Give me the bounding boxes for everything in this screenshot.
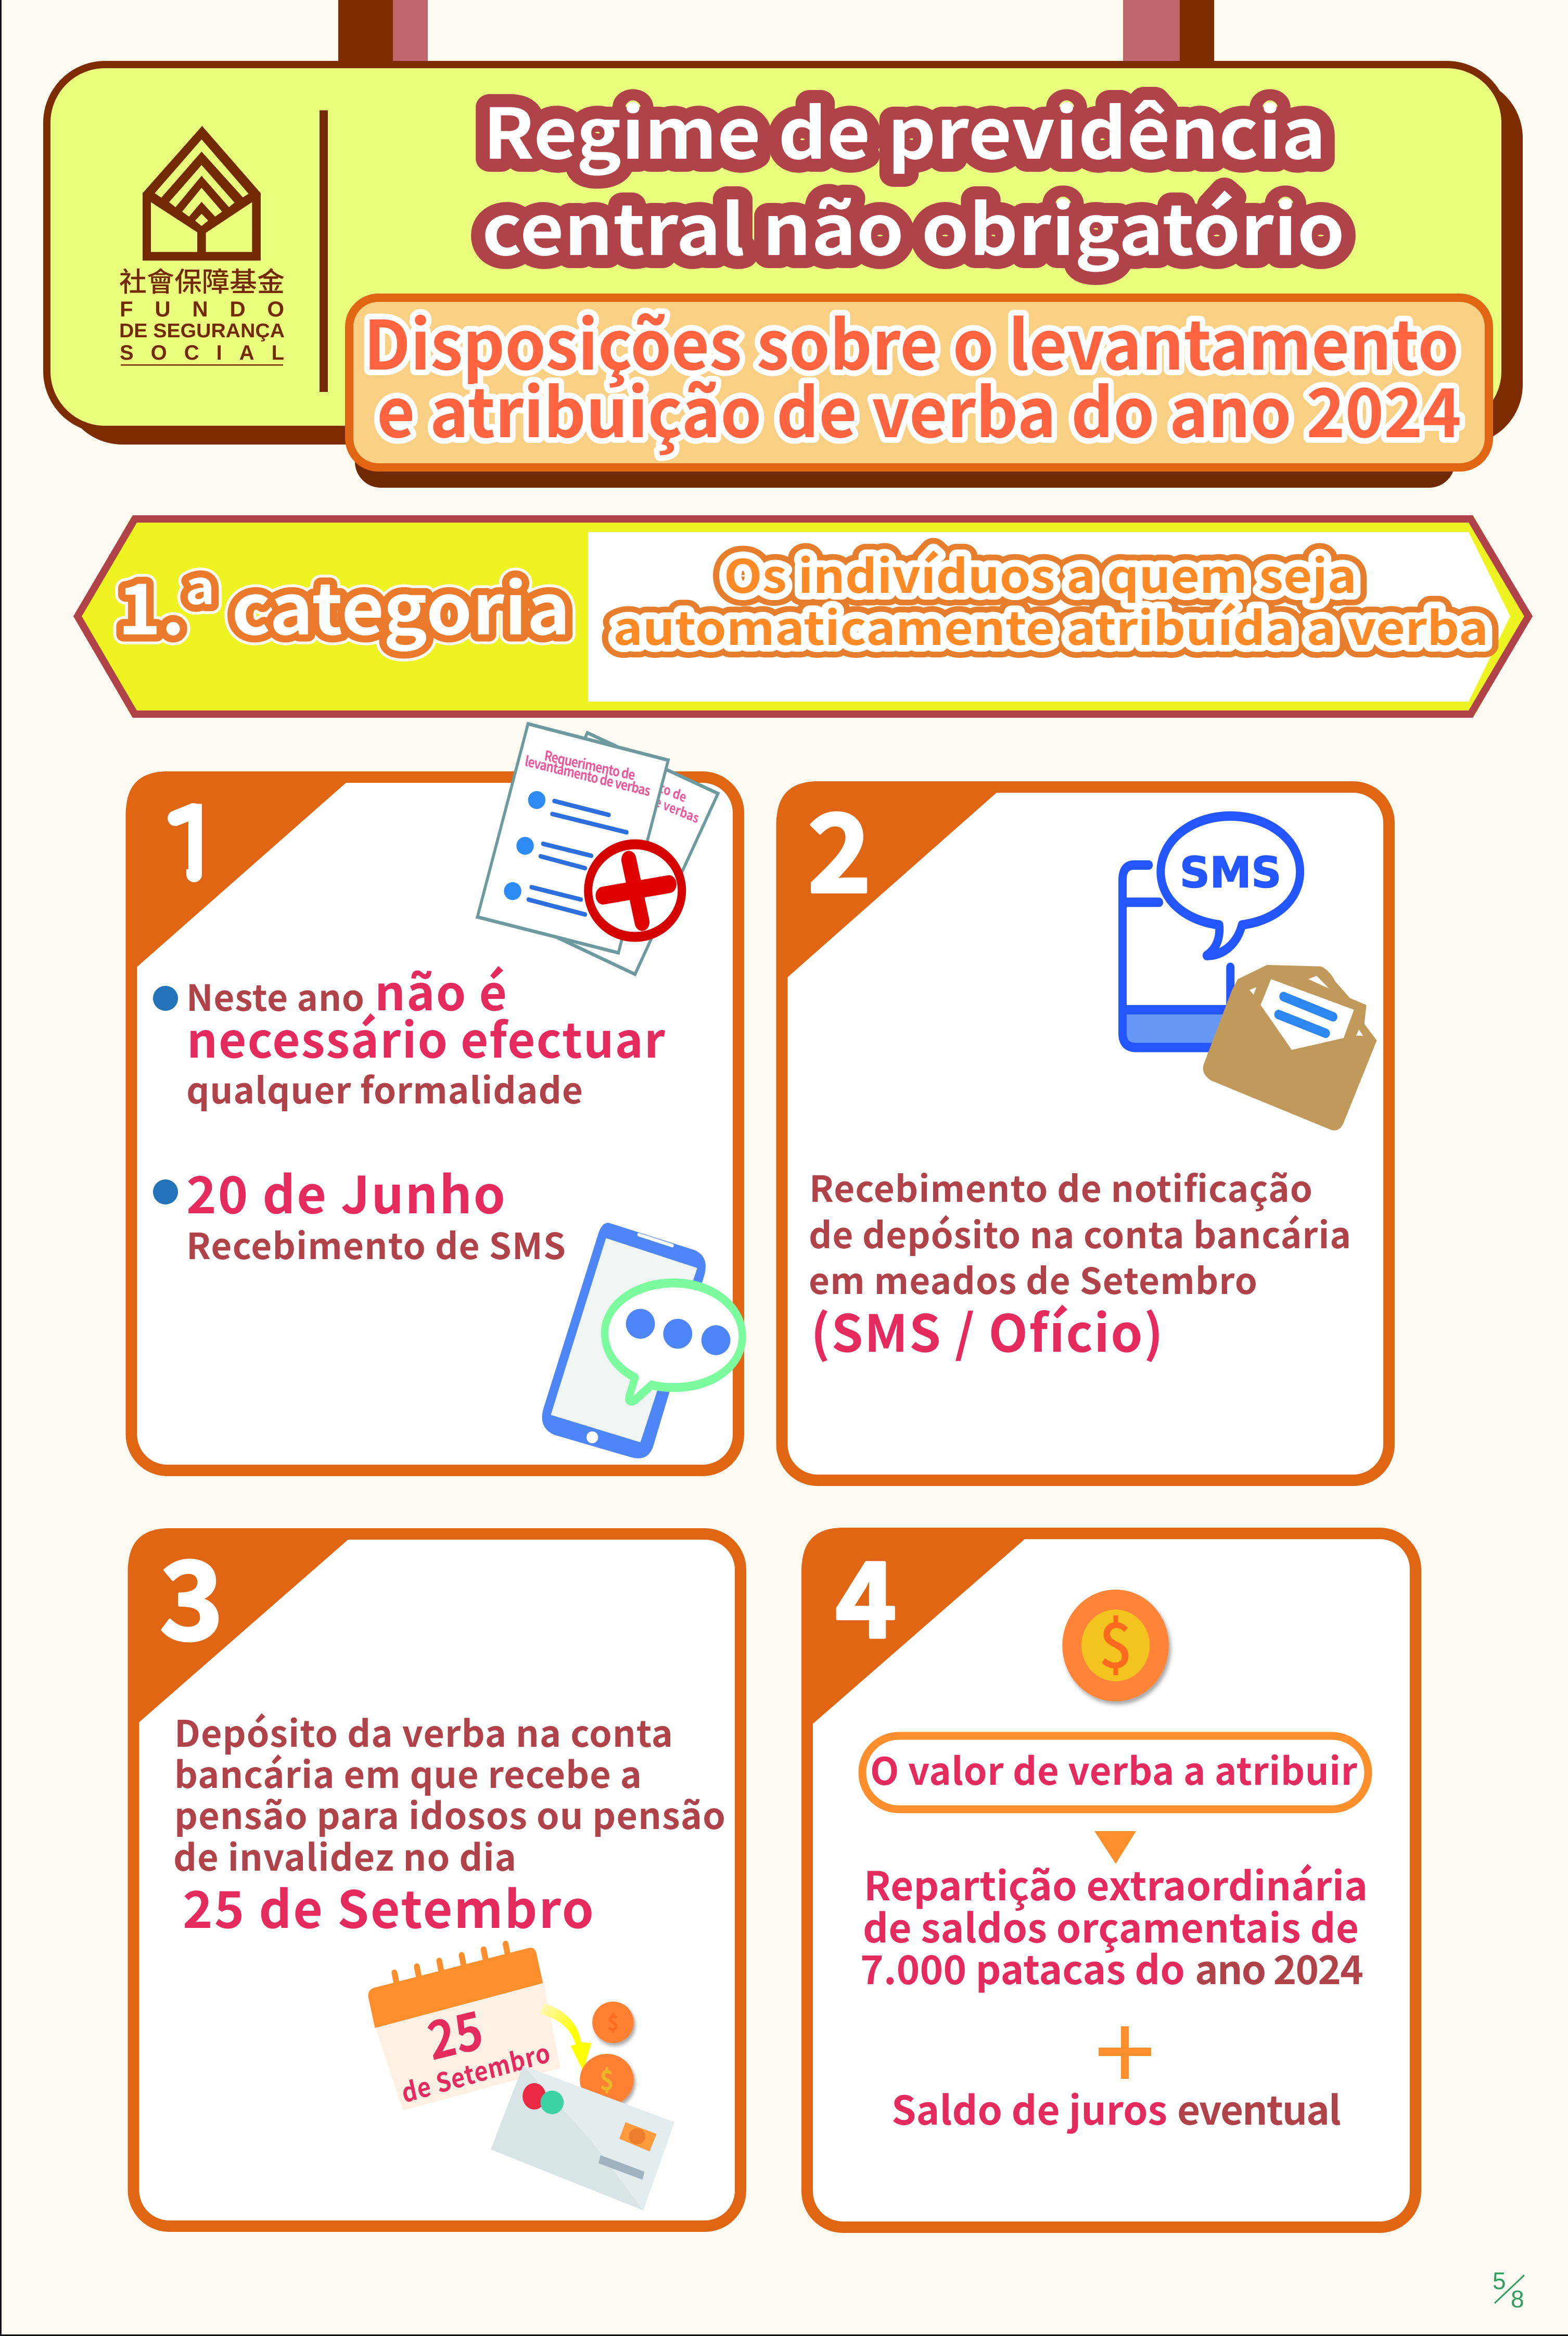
category description: Os indivíduos a quem seja [724, 540, 1357, 606]
text: 20 June SMS [186, 1154, 566, 1269]
text: notification: (SMS / Ofício) [811, 1293, 1163, 1367]
text: notification [809, 1160, 1351, 1367]
bullet 1 [153, 986, 178, 1011]
panel: step 3 [128, 1514, 741, 2226]
subtitle text [364, 291, 1461, 457]
step number 1: 1 [162, 757, 226, 914]
page number: 5 [1493, 2267, 1506, 2294]
category description [613, 540, 1488, 658]
subtitle text: Disposições sobre o levantamento [364, 291, 1459, 389]
icon: smartphone with chat bubble [542, 1223, 743, 1458]
text: deposit date [173, 1705, 725, 1943]
text: deposit date: 25 de Setembro [183, 1869, 594, 1943]
text: no formality needed: necessário efectuar [187, 1002, 666, 1072]
arrow: down triangle [1094, 1831, 1136, 1864]
category banner [73, 515, 1533, 718]
category label: 1.ª categoria [118, 553, 570, 655]
text: notification: em meados de Setembro [809, 1252, 1257, 1304]
page number: 8 [1511, 2286, 1524, 2313]
text: extraordinary allocation: de saldos orçamentais de [863, 1897, 1359, 1954]
icon: cancelled request forms [477, 724, 718, 974]
text: no formality needed: não é [375, 955, 507, 1024]
step number 4: 4 [835, 1517, 897, 1668]
icon: calendar, coins and bank card: $ [600, 2059, 614, 2099]
text: no formality needed: qualquer formalidade [186, 1062, 583, 1114]
icon: cancelled request forms: levantamento de verbas [524, 750, 652, 801]
category description: Os indivíduos a quem seja [724, 540, 1357, 606]
logo: Fundo de Segurança Social: FUNDO [120, 297, 284, 321]
bullet 2 [153, 1179, 178, 1204]
icon: phone SMS and envelope: SMS [1180, 848, 1281, 898]
logo: Fundo de Segurança Social: 社會保障基金 [119, 260, 285, 299]
icon: phone SMS and envelope [1123, 816, 1377, 1131]
text: interest balance [891, 2079, 1341, 2136]
panel: step 4 [801, 1517, 1416, 2227]
logo: Fundo de Segurança Social: SOCIAL [120, 341, 284, 364]
text: interest balance: eventual [1177, 2079, 1341, 2136]
text: deposit date: bancária em que recebe a [174, 1746, 642, 1799]
panel: step 2 [776, 767, 1389, 1480]
hanging straps [338, 0, 1214, 65]
header panel [47, 65, 1523, 488]
step number 1 [168, 803, 202, 882]
panel: step 1 [126, 724, 743, 1470]
page number [1493, 2267, 1524, 2313]
icon: plus [1099, 2026, 1151, 2079]
text: deposit date: pensão para idosos ou pensão [174, 1787, 725, 1840]
category description: automaticamente atribuída a verba [613, 592, 1488, 658]
icon: cancelled request forms: Requerimento de [543, 745, 636, 785]
text: deposit date: Depósito da verba na conta [174, 1705, 673, 1758]
text: extraordinary allocation [860, 1855, 1368, 1996]
logo: Fundo de Segurança Social [119, 126, 285, 366]
logo: Fundo de Segurança Social: DE SEGURANÇA [119, 320, 285, 342]
category label: 1.ª categoria [118, 553, 570, 655]
subtitle panel [349, 291, 1489, 488]
category description: automaticamente atribuída a verba [613, 592, 1488, 658]
text: extraordinary allocation: 7.000 patacas do [860, 1938, 1185, 1996]
icon: cancelled request forms: Requerimento de [594, 750, 689, 806]
text: notification: de depósito na conta bancária [809, 1207, 1351, 1259]
icon: calendar, coins and bank card: $ [608, 2006, 618, 2036]
category description: automaticamente atribuída a verba [613, 592, 1488, 658]
icon: calendar, coins and bank card: de Setembro [398, 2032, 553, 2111]
text: extraordinary allocation: Repartição extraordinária [864, 1855, 1368, 1912]
icon: calendar, coins and bank card: 25 [420, 1987, 488, 2075]
subtitle text: e atribuição de verba do ano 2024 [377, 359, 1461, 457]
text: 20 June SMS: Recebimento de SMS [186, 1217, 566, 1269]
text: notification: Recebimento de notificação [809, 1160, 1312, 1212]
icon: calendar, coins and bank card [368, 1944, 674, 2211]
text: interest balance: Saldo de juros [891, 2079, 1167, 2136]
text: no formality needed [186, 955, 666, 1114]
icon: coin: $ [1099, 1596, 1132, 1686]
step number 3: 3 [160, 1514, 223, 1671]
title: central não obrigatório [482, 174, 1345, 275]
text: extraordinary allocation: ano 2024 [1195, 1938, 1363, 1996]
category description: Os indivíduos a quem seja [724, 540, 1357, 606]
text: 20 June SMS: 20 de Junho [186, 1154, 505, 1228]
label pill: O valor de verba a atribuir [870, 1741, 1358, 1796]
title [482, 78, 1345, 275]
text: deposit date: de invalidez no dia [173, 1829, 516, 1882]
title: Regime de previdência [483, 78, 1326, 179]
icon: coin [1062, 1590, 1169, 1702]
step number 2: 2 [808, 767, 871, 923]
text: no formality needed: Neste ano [186, 969, 364, 1021]
icon: cancelled request forms: levantamento de verbas [570, 756, 702, 827]
